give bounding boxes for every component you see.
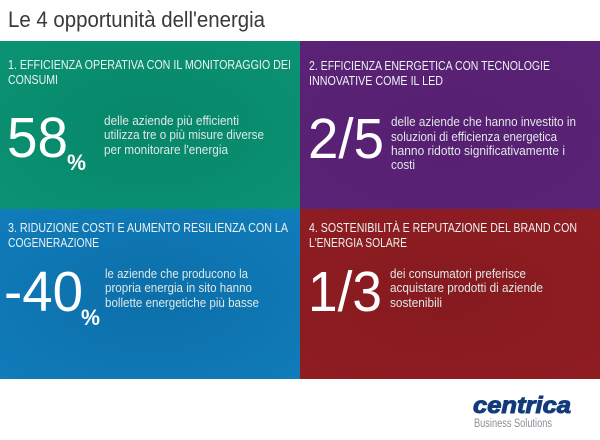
text block: panel 2 description: costi (391, 158, 415, 172)
logo: centrica: Business Solutions (474, 418, 552, 430)
stat: 1/3: 1/3 (308, 260, 382, 324)
heading: panel 4 (309, 220, 577, 250)
heading: panel 4: L'ENERGIA SOLARE (309, 236, 407, 250)
panel: efficienza operativa (0, 41, 300, 209)
text block: panel 2 description: soluzioni di efficienza energetica (391, 130, 557, 144)
logo: centrica (473, 392, 571, 430)
text block: panel 4 description: dei consumatori preferisce (390, 267, 526, 281)
text block: panel 1 description: delle aziende più efficienti (104, 114, 239, 128)
text block: panel 3 description: propria energia in sito hanno (105, 281, 252, 295)
heading: panel 2: INNOVATIVE COME IL LED (309, 74, 443, 88)
stat: 2/5: 2/5 (308, 107, 384, 171)
stat: 58%: 58 (7, 106, 68, 170)
heading: panel 1 (8, 58, 291, 87)
text block: panel 4 description (390, 267, 543, 310)
text block: panel 1 description: utilizza tre o più misure diverse (104, 128, 264, 142)
panel: energia solare (300, 209, 600, 379)
text block: panel 3 description: le aziende che producono la (105, 267, 248, 281)
heading: panel 3 (8, 221, 289, 250)
heading: panel 3: COGENERAZIONE (8, 236, 99, 250)
text block: panel 1 description (104, 114, 264, 157)
text block: panel 2 description: delle aziende che hanno investito in (391, 115, 576, 129)
heading: panel 2: 2. EFFICIENZA ENERGETICA CON TECNOLOGIE (309, 59, 550, 73)
text block: panel 4 description: sostenibili (390, 296, 442, 310)
panel: cogenerazione (0, 209, 300, 379)
text block: panel 2 description (391, 115, 576, 172)
text block: panel 4 description: acquistare prodotti di aziende (390, 281, 543, 295)
text block: panel 2 description: hanno ridotto significativamente i (391, 144, 565, 158)
title: Le 4 opportunità dell'energia (8, 7, 265, 32)
text block: panel 1 description: per monitorare l'energia (104, 143, 228, 157)
stat: -40%: % (81, 305, 100, 330)
text block: panel 3 description (105, 267, 259, 310)
heading: panel 3: 3. RIDUZIONE COSTI E AUMENTO RESILIENZA CON LA (8, 221, 289, 235)
panel: efficienza energetica (300, 41, 600, 209)
heading: panel 2 (309, 59, 550, 88)
logo: centrica: centrica (473, 392, 571, 418)
text block: panel 3 description: bollette energetiche più basse (105, 296, 259, 310)
stat: -40%: -40 (4, 260, 83, 324)
stat: 58%: % (67, 150, 86, 175)
heading: panel 1: 1. EFFICIENZA OPERATIVA CON IL MONITORAGGIO DEI (8, 58, 291, 72)
heading: panel 1: CONSUMI (8, 73, 58, 87)
